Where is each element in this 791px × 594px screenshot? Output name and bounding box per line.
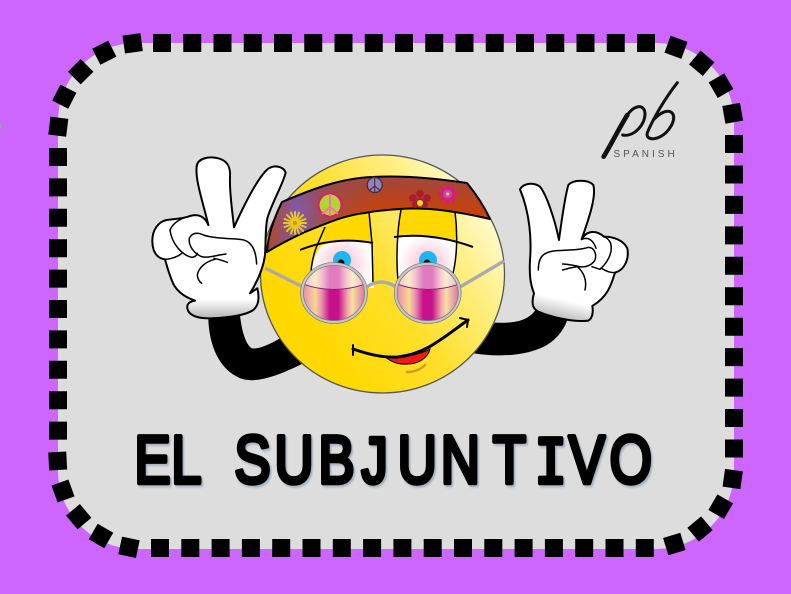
edge mark — [0, 123, 2, 129]
daisy sticker — [284, 212, 306, 234]
title: UNT — [398, 422, 526, 498]
left glove — [152, 157, 286, 318]
title: EL — [134, 422, 201, 498]
dashed border — [48, 33, 743, 558]
right lens — [398, 266, 458, 320]
left eye — [300, 210, 374, 288]
right glove — [520, 181, 628, 321]
left lens — [304, 266, 364, 320]
headband — [267, 176, 490, 252]
title: VO — [569, 422, 652, 498]
green peace sign — [318, 194, 342, 216]
red flower — [409, 190, 431, 208]
right arm — [473, 311, 567, 355]
panel: grey card — [58, 43, 734, 549]
purple peace sign — [367, 178, 382, 192]
logo: pb spanish — [604, 83, 678, 160]
glasses frame — [265, 261, 504, 322]
title: J — [358, 428, 390, 504]
character: hippie smiley — [152, 155, 628, 393]
mouth — [353, 318, 468, 372]
pink flower — [440, 186, 456, 202]
smiley face — [260, 155, 504, 393]
right eye — [394, 208, 473, 288]
title: I — [534, 428, 567, 504]
title: SUB — [234, 422, 355, 498]
logo: pb spanish: SPANISH — [614, 149, 678, 160]
title — [134, 422, 652, 504]
left arm — [208, 315, 303, 380]
